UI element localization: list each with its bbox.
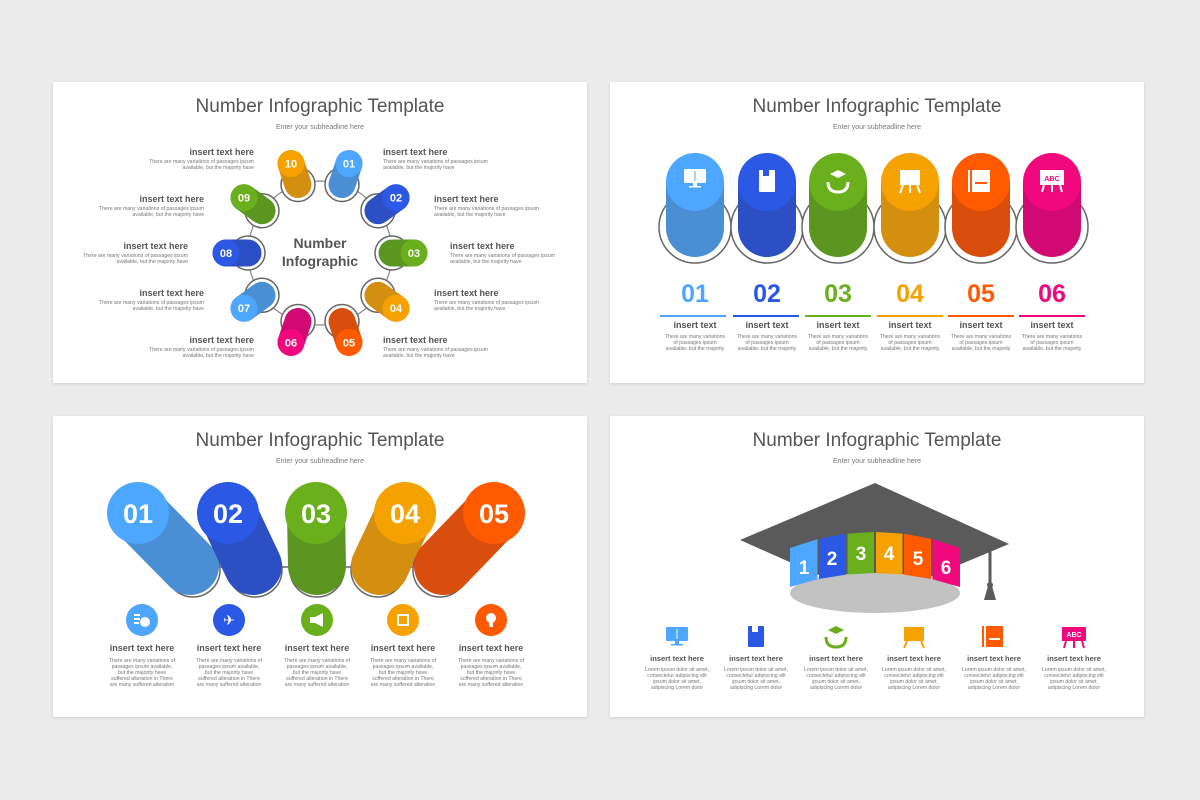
- text items: consectetur adipiscing elit: [884, 673, 944, 679]
- text items: consectetur adipiscing elit: [726, 673, 786, 679]
- text items: Lorem ipsum dolor sit amet,: [724, 667, 788, 673]
- column 05: [945, 153, 1017, 352]
- text items: but the majority have: [467, 670, 515, 676]
- text: 02: There are many variations of passages ipsum: [434, 206, 539, 212]
- item 10: 10: [285, 158, 297, 170]
- text items: adipiscing Lorem dolor: [810, 685, 862, 691]
- text items: but the majority have: [379, 670, 427, 676]
- text: 02: [434, 194, 539, 218]
- text: 06: insert text here: [189, 335, 254, 345]
- text items: adipiscing Lorem dolor: [1048, 685, 1100, 691]
- item 08: [212, 236, 265, 270]
- item 06: [278, 304, 315, 356]
- panel: tilted capsules: [53, 416, 587, 717]
- column 06: available, but the majority: [1023, 346, 1082, 352]
- text: 04: [434, 288, 539, 312]
- text: 02: available, but the majority have: [434, 212, 506, 218]
- text: 08: [83, 241, 188, 265]
- text items: suffered alteration in There: [372, 676, 434, 682]
- text items: Lorem ipsum dolor sit amet,: [882, 667, 946, 673]
- capsule 02: 02: [213, 499, 243, 529]
- text: 05: available, but the majority have: [383, 353, 455, 359]
- text items: adipiscing Lorem dolor: [730, 685, 782, 691]
- text: 05: insert text here: [383, 335, 448, 345]
- column 02: There are many variations: [737, 334, 798, 340]
- item 03: 03: [408, 248, 420, 260]
- item 09: 09: [238, 193, 250, 205]
- column 06: of passages ipsum: [1030, 340, 1074, 346]
- icon row: ABC: [1066, 632, 1082, 639]
- column 05: of passages ipsum: [959, 340, 1003, 346]
- text items: adipiscing Lorem dolor: [651, 685, 703, 691]
- text: 10: available, but the majority have: [182, 165, 254, 171]
- text items: ipsum dolor sit amet,: [812, 679, 860, 685]
- icon: plane: [213, 604, 245, 636]
- text items: Lorem ipsum dolor sit amet,: [962, 667, 1026, 673]
- column 06: [1016, 153, 1088, 352]
- text: 01: [383, 147, 488, 171]
- text items: but the majority have: [293, 670, 341, 676]
- item 02: 02: [390, 193, 402, 205]
- item 04: 04: [390, 303, 403, 315]
- column 01: 01: [681, 280, 709, 308]
- text items: ipsum dolor sit amet,: [732, 679, 780, 685]
- text items: [109, 643, 525, 688]
- text items: ipsum dolor sit amet,: [653, 679, 701, 685]
- icon: bulb: [475, 604, 507, 636]
- panel: graduation cap: [610, 416, 1144, 717]
- subtitle: Enter your subheadline here: [276, 458, 364, 465]
- item 02: [361, 184, 410, 228]
- item 08: 08: [220, 248, 232, 260]
- text: 01: insert text here: [383, 147, 448, 157]
- text items: insert text here: [809, 654, 863, 663]
- column 03: insert text: [816, 320, 860, 330]
- text items: suffered alteration in There: [460, 676, 522, 682]
- text: 09: insert text here: [139, 194, 204, 204]
- capsule 04: 04: [390, 499, 420, 529]
- text: 07: insert text here: [139, 288, 204, 298]
- capsule 03: [285, 482, 347, 597]
- text: 07: There are many variations of passages ipsum: [99, 300, 204, 306]
- graduation cap: 4: [884, 544, 895, 565]
- center label: Infographic: [282, 253, 358, 269]
- text items: are many suffered alteration: [110, 682, 174, 688]
- column 06: insert text: [1030, 320, 1074, 330]
- center label: [282, 235, 358, 269]
- text items: [645, 654, 1106, 691]
- text items: There are many variations of: [109, 658, 176, 664]
- text: 05: [383, 335, 488, 359]
- icon row: [666, 626, 1086, 648]
- column 01: insert text: [673, 320, 717, 330]
- text items: passages ipsum available,: [373, 664, 433, 670]
- text: 06: available, but the majority have: [182, 353, 254, 359]
- capsule 05: [413, 482, 525, 597]
- text: 04: available, but the majority have: [434, 306, 506, 312]
- title: Number Infographic Template: [753, 96, 1001, 117]
- text items: are many suffered alteration: [371, 682, 435, 688]
- text items: insert text here: [729, 654, 783, 663]
- column 03: 03: [824, 280, 852, 308]
- column 03: of passages ipsum: [816, 340, 860, 346]
- item 07: 07: [238, 303, 250, 315]
- text: 07: available, but the majority have: [132, 306, 204, 312]
- text: 06: [149, 335, 254, 359]
- column 04: [874, 153, 946, 352]
- text items: passages ipsum available,: [287, 664, 347, 670]
- column 02: [731, 153, 803, 352]
- capsule 01: [107, 482, 220, 597]
- text items: insert text here: [887, 654, 941, 663]
- text items: suffered alteration in There: [111, 676, 173, 682]
- graduation cap: [740, 483, 1009, 613]
- column 05: available, but the majority: [952, 346, 1011, 352]
- text items: are many suffered alteration: [197, 682, 261, 688]
- icon: megaphone: [301, 604, 333, 636]
- text items: ipsum dolor sit amet,: [970, 679, 1018, 685]
- center label: Number: [294, 235, 347, 251]
- column 01: of passages ipsum: [673, 340, 717, 346]
- text: 03: insert text here: [450, 241, 515, 251]
- item 07: [230, 278, 279, 322]
- text: 04: insert text here: [434, 288, 499, 298]
- capsule 04: [351, 482, 436, 597]
- text: 02: insert text here: [434, 194, 499, 204]
- column 05: insert text: [959, 320, 1003, 330]
- title: Number Infographic Template: [753, 430, 1001, 451]
- item 06: 06: [285, 337, 297, 349]
- text items: suffered alteration in There: [198, 676, 260, 682]
- text items: suffered alteration in There: [286, 676, 348, 682]
- text items: are many suffered alteration: [459, 682, 523, 688]
- column 03: available, but the majority: [809, 346, 868, 352]
- icon: frame: [387, 604, 419, 636]
- column 02: 02: [753, 280, 781, 308]
- item 10: [278, 150, 315, 202]
- icon: plane: ✈: [223, 613, 235, 629]
- graduation cap: 6: [941, 558, 951, 579]
- column 02: insert text: [745, 320, 789, 330]
- text items: passages ipsum available,: [461, 664, 521, 670]
- graduation cap: 2: [827, 549, 837, 570]
- text items: but the majority have: [118, 670, 166, 676]
- text items: insert text here: [650, 654, 704, 663]
- icon: coins: [126, 604, 158, 636]
- subtitle: Enter your subheadline here: [833, 124, 921, 131]
- text: 09: [99, 194, 204, 218]
- column 06: ABC: [1044, 176, 1060, 183]
- text: 10: insert text here: [189, 147, 254, 157]
- text items: are many suffered alteration: [285, 682, 349, 688]
- text items: There are many variations of: [284, 658, 351, 664]
- item 05: [325, 304, 362, 356]
- text: 01: There are many variations of passages ipsum: [383, 159, 488, 165]
- column 04: insert text: [888, 320, 932, 330]
- column 04: of passages ipsum: [888, 340, 932, 346]
- graduation cap: 3: [856, 544, 866, 565]
- subtitle: Enter your subheadline here: [276, 124, 364, 131]
- text items: consectetur adipiscing elit: [1044, 673, 1104, 679]
- column 04: 04: [896, 280, 924, 308]
- column 02: available, but the majority: [738, 346, 797, 352]
- graduation cap: 5: [913, 549, 924, 570]
- column 01: [659, 153, 731, 352]
- text items: insert text here: [371, 643, 435, 653]
- text: 03: [450, 241, 555, 265]
- column 02: of passages ipsum: [745, 340, 789, 346]
- text items: ipsum dolor sit amet,: [1050, 679, 1098, 685]
- column 01: There are many variations: [665, 334, 726, 340]
- panel: circular number infographic: [53, 82, 587, 383]
- text: 03: available, but the majority have: [450, 259, 522, 265]
- text: 09: There are many variations of passages ipsum: [99, 206, 204, 212]
- text items: insert text here: [197, 643, 261, 653]
- text items: adipiscing Lorem dolor: [888, 685, 940, 691]
- text items: consectetur adipiscing elit: [647, 673, 707, 679]
- text: 08: There are many variations of passages ipsum: [83, 253, 188, 259]
- text items: There are many variations of: [196, 658, 263, 664]
- item 04: [361, 278, 410, 322]
- text items: passages ipsum available,: [112, 664, 172, 670]
- text: 06: There are many variations of passages ipsum: [149, 347, 254, 353]
- item 09: [230, 184, 279, 228]
- title: Number Infographic Template: [196, 96, 444, 117]
- capsule 01: 01: [123, 499, 153, 529]
- text items: insert text here: [459, 643, 523, 653]
- text: 08: insert text here: [123, 241, 188, 251]
- capsule 03: 03: [301, 499, 331, 529]
- column 06: 06: [1038, 280, 1066, 308]
- text items: consectetur adipiscing elit: [964, 673, 1024, 679]
- column 04: available, but the majority: [881, 346, 940, 352]
- text: 07: [99, 288, 204, 312]
- subtitle: Enter your subheadline here: [833, 458, 921, 465]
- text: 03: There are many variations of passages ipsum: [450, 253, 555, 259]
- text: 10: [149, 147, 254, 171]
- column 06: There are many variations: [1022, 334, 1083, 340]
- text items: Lorem ipsum dolor sit amet,: [645, 667, 709, 673]
- text: 04: There are many variations of passages ipsum: [434, 300, 539, 306]
- column 03: [802, 153, 874, 352]
- text items: There are many variations of: [370, 658, 437, 664]
- text: 10: There are many variations of passages ipsum: [149, 159, 254, 165]
- item 03: [375, 236, 428, 270]
- text items: Lorem ipsum dolor sit amet,: [804, 667, 868, 673]
- item 01: 01: [343, 158, 355, 170]
- column 01: available, but the majority: [666, 346, 725, 352]
- capsule 02: [197, 482, 282, 597]
- text items: Lorem ipsum dolor sit amet,: [1042, 667, 1106, 673]
- text: 01: available, but the majority have: [383, 165, 455, 171]
- text items: but the majority have: [205, 670, 253, 676]
- text items: insert text here: [967, 654, 1021, 663]
- item 05: 05: [343, 337, 355, 349]
- text items: There are many variations of: [458, 658, 525, 664]
- column 05: 05: [967, 280, 995, 308]
- text: 05: There are many variations of passages ipsum: [383, 347, 488, 353]
- graduation cap: 1: [799, 558, 810, 579]
- title: Number Infographic Template: [196, 430, 444, 451]
- column 03: There are many variations: [808, 334, 869, 340]
- column 05: There are many variations: [951, 334, 1012, 340]
- text: 08: available, but the majority have: [116, 259, 188, 265]
- text items: ipsum dolor sit amet,: [890, 679, 938, 685]
- column 04: There are many variations: [880, 334, 941, 340]
- text items: insert text here: [285, 643, 349, 653]
- text items: consectetur adipiscing elit: [806, 673, 866, 679]
- text: 09: available, but the majority have: [132, 212, 204, 218]
- item 01: [325, 150, 362, 202]
- capsule 05: 05: [479, 499, 509, 529]
- text items: adipiscing Lorem dolor: [968, 685, 1020, 691]
- text items: insert text here: [110, 643, 174, 653]
- text items: insert text here: [1047, 654, 1101, 663]
- panel: cylinder columns: [610, 82, 1144, 383]
- text items: passages ipsum available,: [199, 664, 259, 670]
